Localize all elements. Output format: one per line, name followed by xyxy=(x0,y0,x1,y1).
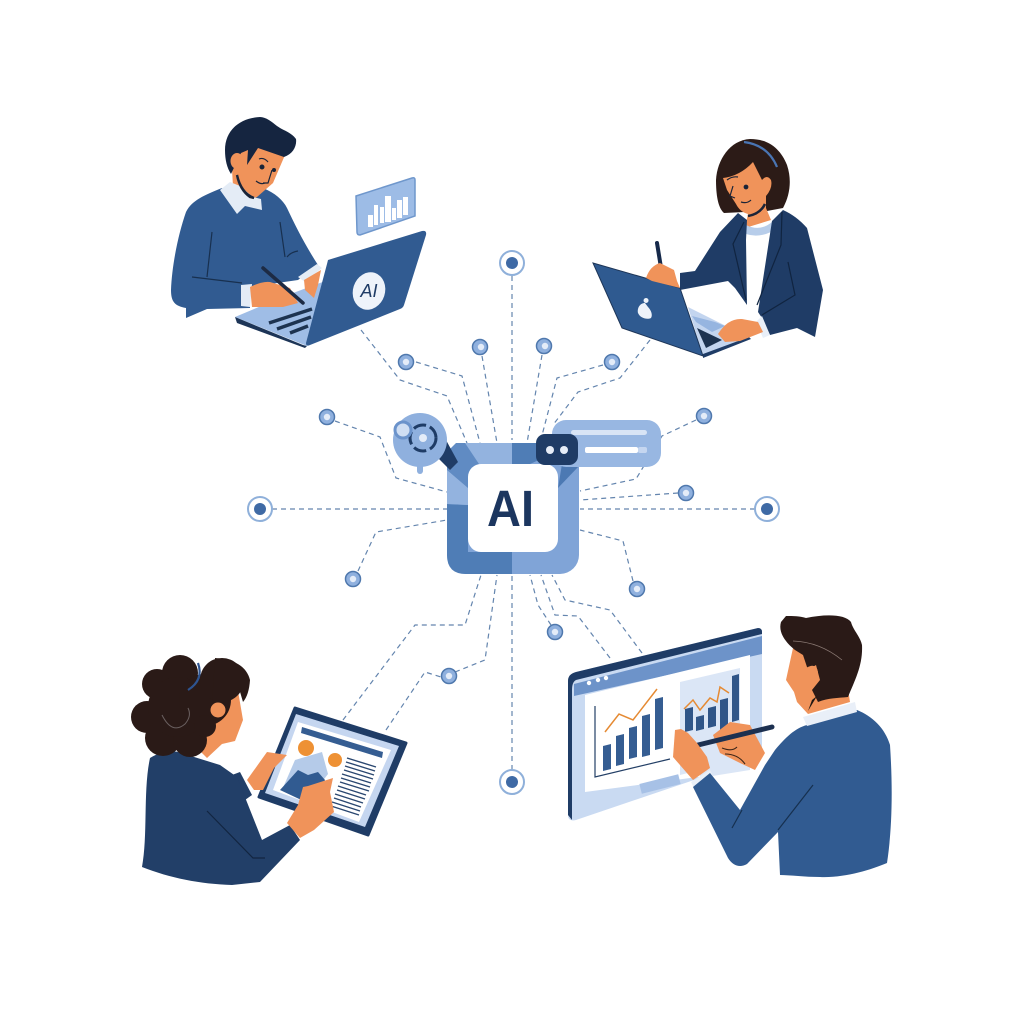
tablet xyxy=(259,708,406,835)
hair highlight xyxy=(793,641,842,660)
person 2: woman at laptop xyxy=(593,139,823,358)
right chart bars xyxy=(685,674,739,732)
chat icon xyxy=(536,434,578,465)
person 3: woman with tablet xyxy=(131,655,406,885)
apple-like logo xyxy=(638,298,652,319)
large ring node bottom xyxy=(500,770,524,794)
left chart bars xyxy=(603,697,663,771)
person 4: man at chart display xyxy=(568,615,892,877)
pen xyxy=(698,727,772,745)
blazer lapel lines xyxy=(733,212,795,315)
hair xyxy=(225,117,296,174)
gear icon xyxy=(393,413,458,474)
ear xyxy=(805,666,818,688)
jacket xyxy=(142,751,300,885)
pen xyxy=(657,243,663,280)
neck and face xyxy=(232,144,285,200)
face details xyxy=(727,177,765,216)
hub white center xyxy=(468,464,558,552)
monitor xyxy=(568,628,762,820)
headband xyxy=(744,142,777,167)
floating bar chart card xyxy=(356,178,415,235)
collar xyxy=(220,182,262,214)
right cuff and hand xyxy=(756,316,770,338)
person 1: man at laptop xyxy=(171,117,426,348)
laptop xyxy=(235,231,426,348)
screen button xyxy=(639,774,681,794)
screen dots xyxy=(587,681,591,685)
cuff xyxy=(691,770,715,792)
ear xyxy=(230,153,244,169)
hair xyxy=(716,139,790,213)
screen white panel xyxy=(585,655,750,792)
left cuff and writing hand xyxy=(241,284,252,307)
left chart line xyxy=(605,689,657,732)
hair band xyxy=(188,663,200,690)
hub AI label: AI xyxy=(487,480,534,537)
tablet header bar xyxy=(301,727,383,758)
pen xyxy=(263,268,303,303)
sweater xyxy=(693,710,892,877)
small nodes xyxy=(320,338,712,684)
large ring node right xyxy=(755,497,779,521)
far hand xyxy=(713,722,765,770)
sweater fold lines xyxy=(732,785,813,830)
laptop xyxy=(593,263,751,358)
face and neck xyxy=(723,162,771,228)
sleeve behind xyxy=(232,772,252,800)
sweater fold lines xyxy=(192,222,298,283)
shirt xyxy=(745,222,772,310)
small node highlights xyxy=(324,343,707,679)
lower hand xyxy=(287,778,334,838)
hair xyxy=(131,655,250,757)
sweater xyxy=(171,188,318,318)
tablet text lines xyxy=(331,758,376,815)
large ring node left xyxy=(248,497,272,521)
network of dashed connectors xyxy=(272,276,755,770)
right chart line xyxy=(684,687,729,710)
face details xyxy=(237,158,275,198)
left hand with pen xyxy=(646,263,680,288)
laptop AI badge: AI xyxy=(359,281,378,301)
neck and face xyxy=(786,640,850,714)
near hand xyxy=(673,729,710,780)
tablet image xyxy=(280,740,342,805)
jacket fold line xyxy=(207,811,265,858)
small right panel xyxy=(680,668,740,775)
far hand finger lines xyxy=(722,747,745,764)
hub tile xyxy=(447,443,579,574)
ear xyxy=(210,702,226,718)
blazer xyxy=(680,210,823,337)
neck and face xyxy=(197,685,243,758)
left chart axes xyxy=(595,706,670,777)
laptop AI badge xyxy=(348,268,390,314)
neck shadow xyxy=(808,696,817,711)
hair highlight xyxy=(162,708,189,728)
speech bubble with lines xyxy=(552,420,661,467)
hair xyxy=(780,615,862,702)
central AI hub xyxy=(393,413,661,574)
collar xyxy=(803,702,857,726)
right cuff and hand xyxy=(298,264,322,282)
upper hand xyxy=(247,752,287,790)
large ring node top xyxy=(500,251,524,275)
network nodes xyxy=(248,251,779,794)
